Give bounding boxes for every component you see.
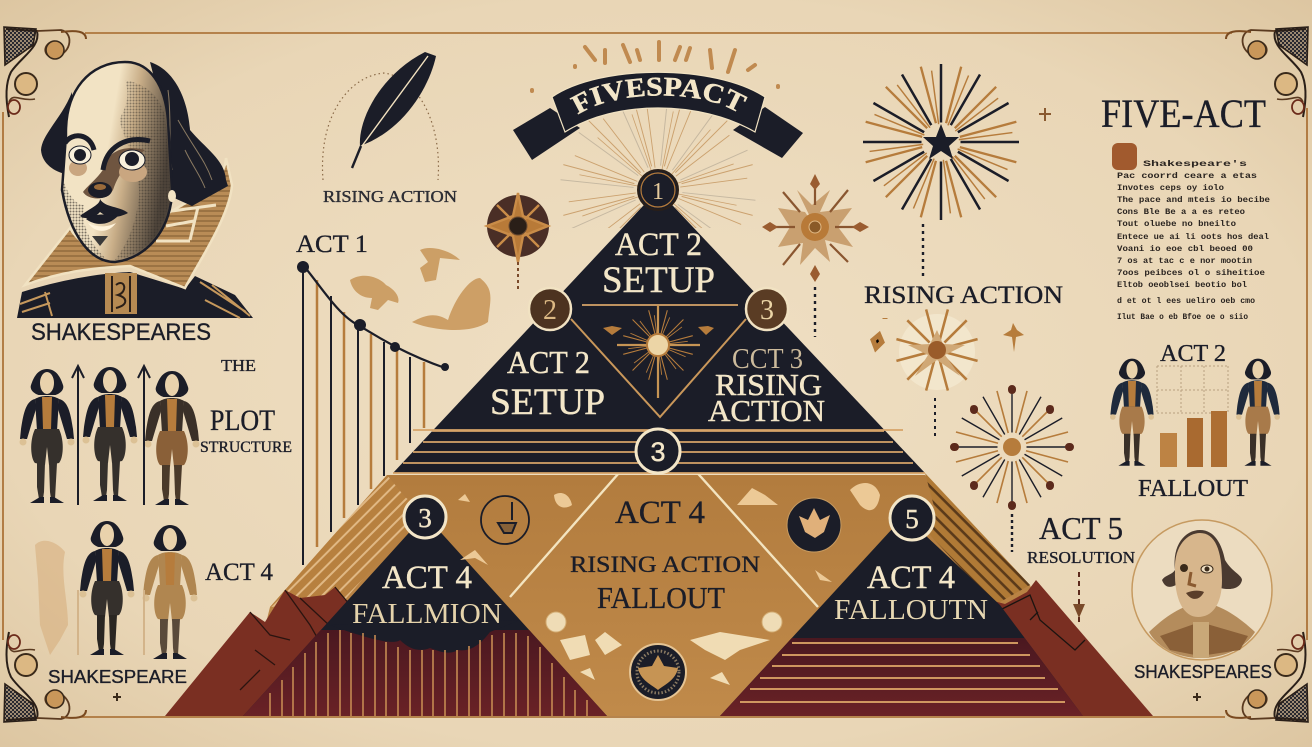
portrait medallion — [1132, 520, 1272, 660]
label: fallout right: FALLOUT — [1138, 476, 1248, 502]
plot structure heading: PLOT — [210, 404, 275, 437]
number badge 3 centre: 3 — [650, 437, 666, 467]
text block: intro paragraph: Ilut Bae o eb Bfoe oe o siio — [1117, 313, 1248, 322]
lower figures — [35, 521, 198, 659]
pyramid labels: top: ACT 2 — [615, 227, 702, 263]
pyramid labels: centre: FALLOUT — [597, 580, 725, 615]
number badge 5: 5 — [905, 504, 919, 534]
hatched band left — [270, 475, 422, 607]
plot structure heading: STRUCTURE — [200, 439, 292, 456]
pyramid labels: left upper — [490, 344, 605, 423]
label: Shakespeares: SHAKESPEARES — [31, 319, 211, 346]
text block: intro paragraph — [1117, 160, 1270, 322]
icon: lower tan flower — [873, 309, 1024, 440]
label: rising action right: RISING ACTION — [864, 282, 1063, 309]
icon: lower burst — [954, 389, 1070, 552]
lower right triangle — [720, 515, 1090, 718]
number badge 5 — [890, 496, 934, 540]
pyramid labels: top — [602, 227, 715, 301]
pyramid labels: lower right: FALLOUTN — [834, 595, 988, 626]
number badge 3 left — [404, 496, 446, 538]
heading: five-act: FIVE-ACT — [1101, 91, 1266, 136]
icon: small cross — [1039, 108, 1051, 121]
top tier divider lines — [393, 305, 925, 473]
lower left triangle — [243, 532, 607, 716]
text block: intro paragraph: Shakespeare's — [1143, 160, 1247, 169]
pyramid labels: left upper: ACT 2 — [507, 344, 590, 380]
inner diamond lines — [571, 319, 746, 417]
icon: small brown seal — [1112, 143, 1137, 170]
chart: mini bars between figures — [1157, 366, 1228, 467]
sun rays behind apex — [560, 108, 756, 228]
text block: intro paragraph: Cons Ble Be a a es reteo — [1117, 208, 1245, 217]
figures beside mini bars — [1110, 359, 1280, 466]
pyramid labels: lower left: FALLMION — [352, 599, 502, 630]
text block: intro paragraph: The pace and mteis io becibe — [1117, 196, 1270, 205]
label: Act 5 resolution — [1027, 510, 1135, 625]
decorative tan flourishes — [350, 248, 490, 330]
pyramid labels: right upper: RISING — [715, 367, 822, 402]
pyramid labels: centre: RISING ACTION — [570, 552, 760, 577]
text block: intro paragraph: Entece ue ai li oots hos deal — [1117, 233, 1269, 242]
label: Act 1: ACT 1 — [296, 231, 368, 258]
portrait: Shakespeare engraving — [17, 62, 253, 318]
label: Act 5 resolution: RESOLUTION — [1027, 548, 1135, 567]
centre diamond outline — [510, 457, 818, 607]
banner: title ribbon: FIVESPACT — [570, 77, 748, 114]
text block: intro paragraph: Voani io eoe cbl beoed 00 — [1117, 245, 1253, 254]
icon: lamp medallion — [481, 496, 529, 544]
small ornaments under labels — [113, 693, 1201, 701]
text block: intro paragraph: Pac coorrd ceare a etas — [1117, 172, 1257, 181]
pyramid labels: lower right: ACT 4 — [867, 560, 955, 596]
number badge 3 right — [746, 288, 788, 330]
pyramid: lower tan tier — [243, 475, 1083, 716]
icon: inner sun — [603, 305, 714, 398]
label: Act 2 right: ACT 2 — [1160, 341, 1226, 367]
pyramid labels: left upper: SETUP — [490, 382, 605, 423]
icon: tan flower — [762, 174, 869, 337]
number badge 3 left: 3 — [418, 503, 432, 533]
pyramid labels: right upper — [708, 344, 825, 428]
icon: compass medallion — [487, 193, 549, 290]
icon: heart medallion — [630, 644, 686, 700]
label: Shakespeare: SHAKESPEARE — [48, 667, 187, 687]
text block: intro paragraph: Eltob oeoblsei beotio bol — [1117, 281, 1247, 290]
pyramid labels: lower right — [834, 560, 988, 626]
label: Act 5 resolution: ACT 5 — [1039, 510, 1123, 546]
icon: big star burst — [863, 64, 1019, 277]
pyramid: top dark tier — [393, 190, 925, 473]
chart: act 1 falling line with vertical bars — [297, 261, 449, 565]
plot structure heading — [200, 356, 292, 456]
pyramid labels: top: SETUP — [602, 260, 715, 301]
icon: star medallion — [787, 498, 841, 552]
number badge 3 centre — [636, 429, 680, 473]
number badge 2 — [529, 288, 571, 330]
label: Shakespeares bottom right: SHAKESPEARES — [1134, 662, 1272, 682]
banner: title ribbon — [513, 72, 803, 160]
pyramid labels: right upper: ACTION — [708, 393, 825, 428]
pyramid labels: lower left — [352, 560, 502, 630]
text block: intro paragraph: Invotes ceps oy iolo — [1117, 184, 1224, 193]
label: rising action top: RISING ACTION — [323, 187, 457, 206]
red mountain left — [165, 587, 420, 716]
pyramid labels: right upper: CCT 3 — [732, 344, 803, 375]
number badge 1 — [638, 170, 678, 210]
text block: intro paragraph: d et ot l ees ueliro oeb cmo — [1117, 297, 1255, 306]
number badge 2: 2 — [543, 295, 557, 326]
text block: intro paragraph: Tout oluebe no bneilto — [1117, 220, 1236, 229]
text block: intro paragraph: 7oos peibces ol o siheitioe — [1117, 269, 1265, 278]
plot structure heading: THE — [221, 356, 256, 375]
icon: quill in dotted arc — [322, 52, 438, 180]
number badge 1: 1 — [652, 179, 664, 205]
red mountain right — [990, 580, 1153, 716]
pyramid labels: centre: ACT 4 — [615, 495, 705, 531]
pyramid labels: lower left: ACT 4 — [382, 560, 472, 596]
tan tier decorations — [458, 483, 880, 685]
hatched band right — [925, 473, 1030, 605]
pyramid labels: centre — [570, 495, 760, 615]
label: Act 4: ACT 4 — [205, 559, 273, 586]
sparkles above banner — [532, 42, 778, 91]
three standing figures with arrows — [20, 366, 200, 505]
number badge 3 right: 3 — [760, 295, 774, 326]
text block: intro paragraph: 7 os at tac c e nor mootin — [1117, 257, 1252, 266]
